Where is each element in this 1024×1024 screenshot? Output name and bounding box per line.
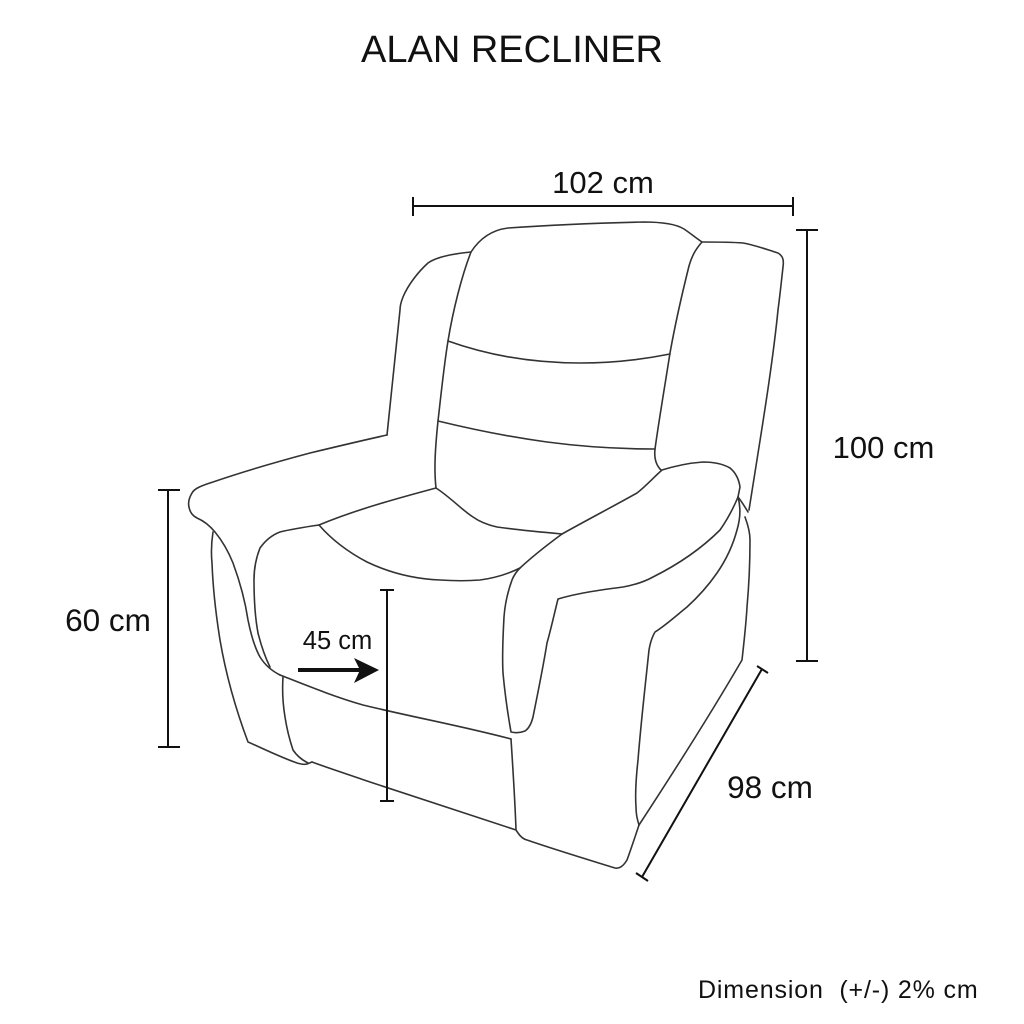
title: ALAN RECLINER [361,29,663,71]
side panel outer [738,497,748,512]
seat cushion [254,525,319,667]
seat front seam [280,675,511,739]
dimension: depth 98 cm: 98 cm [727,769,813,805]
dimension: height 100 cm [796,230,934,661]
right arm [503,462,740,733]
left arm top [189,435,387,675]
side panel inner [636,497,740,825]
seat top edge [319,488,562,534]
footrest right edge [511,739,639,868]
dimension: depth 98 cm [636,666,813,881]
footnote: Dimension (+/-) 2% cm [698,976,979,1004]
dimension: arm height 60 cm [65,490,180,747]
dimension: height 100 cm: 100 cm [833,430,934,465]
right wing [702,242,783,510]
footrest left edge [283,677,308,763]
dimension: width 102 cm [413,165,793,216]
arrow: seat height pointer [298,658,379,683]
seat front curve [319,525,520,581]
recliner line drawing [189,222,783,868]
dimension: arm height 60 cm: 60 cm [65,602,151,638]
backrest centre [435,222,702,488]
footrest bottom [312,762,516,830]
left wing [387,252,471,435]
left arm front panel [211,532,312,764]
dimension: width 102 cm: 102 cm [552,165,654,200]
dimension: seat height 45 cm [303,590,394,801]
back cushion seams [448,341,670,363]
dimension: seat height 45 cm: 45 cm [303,627,372,655]
